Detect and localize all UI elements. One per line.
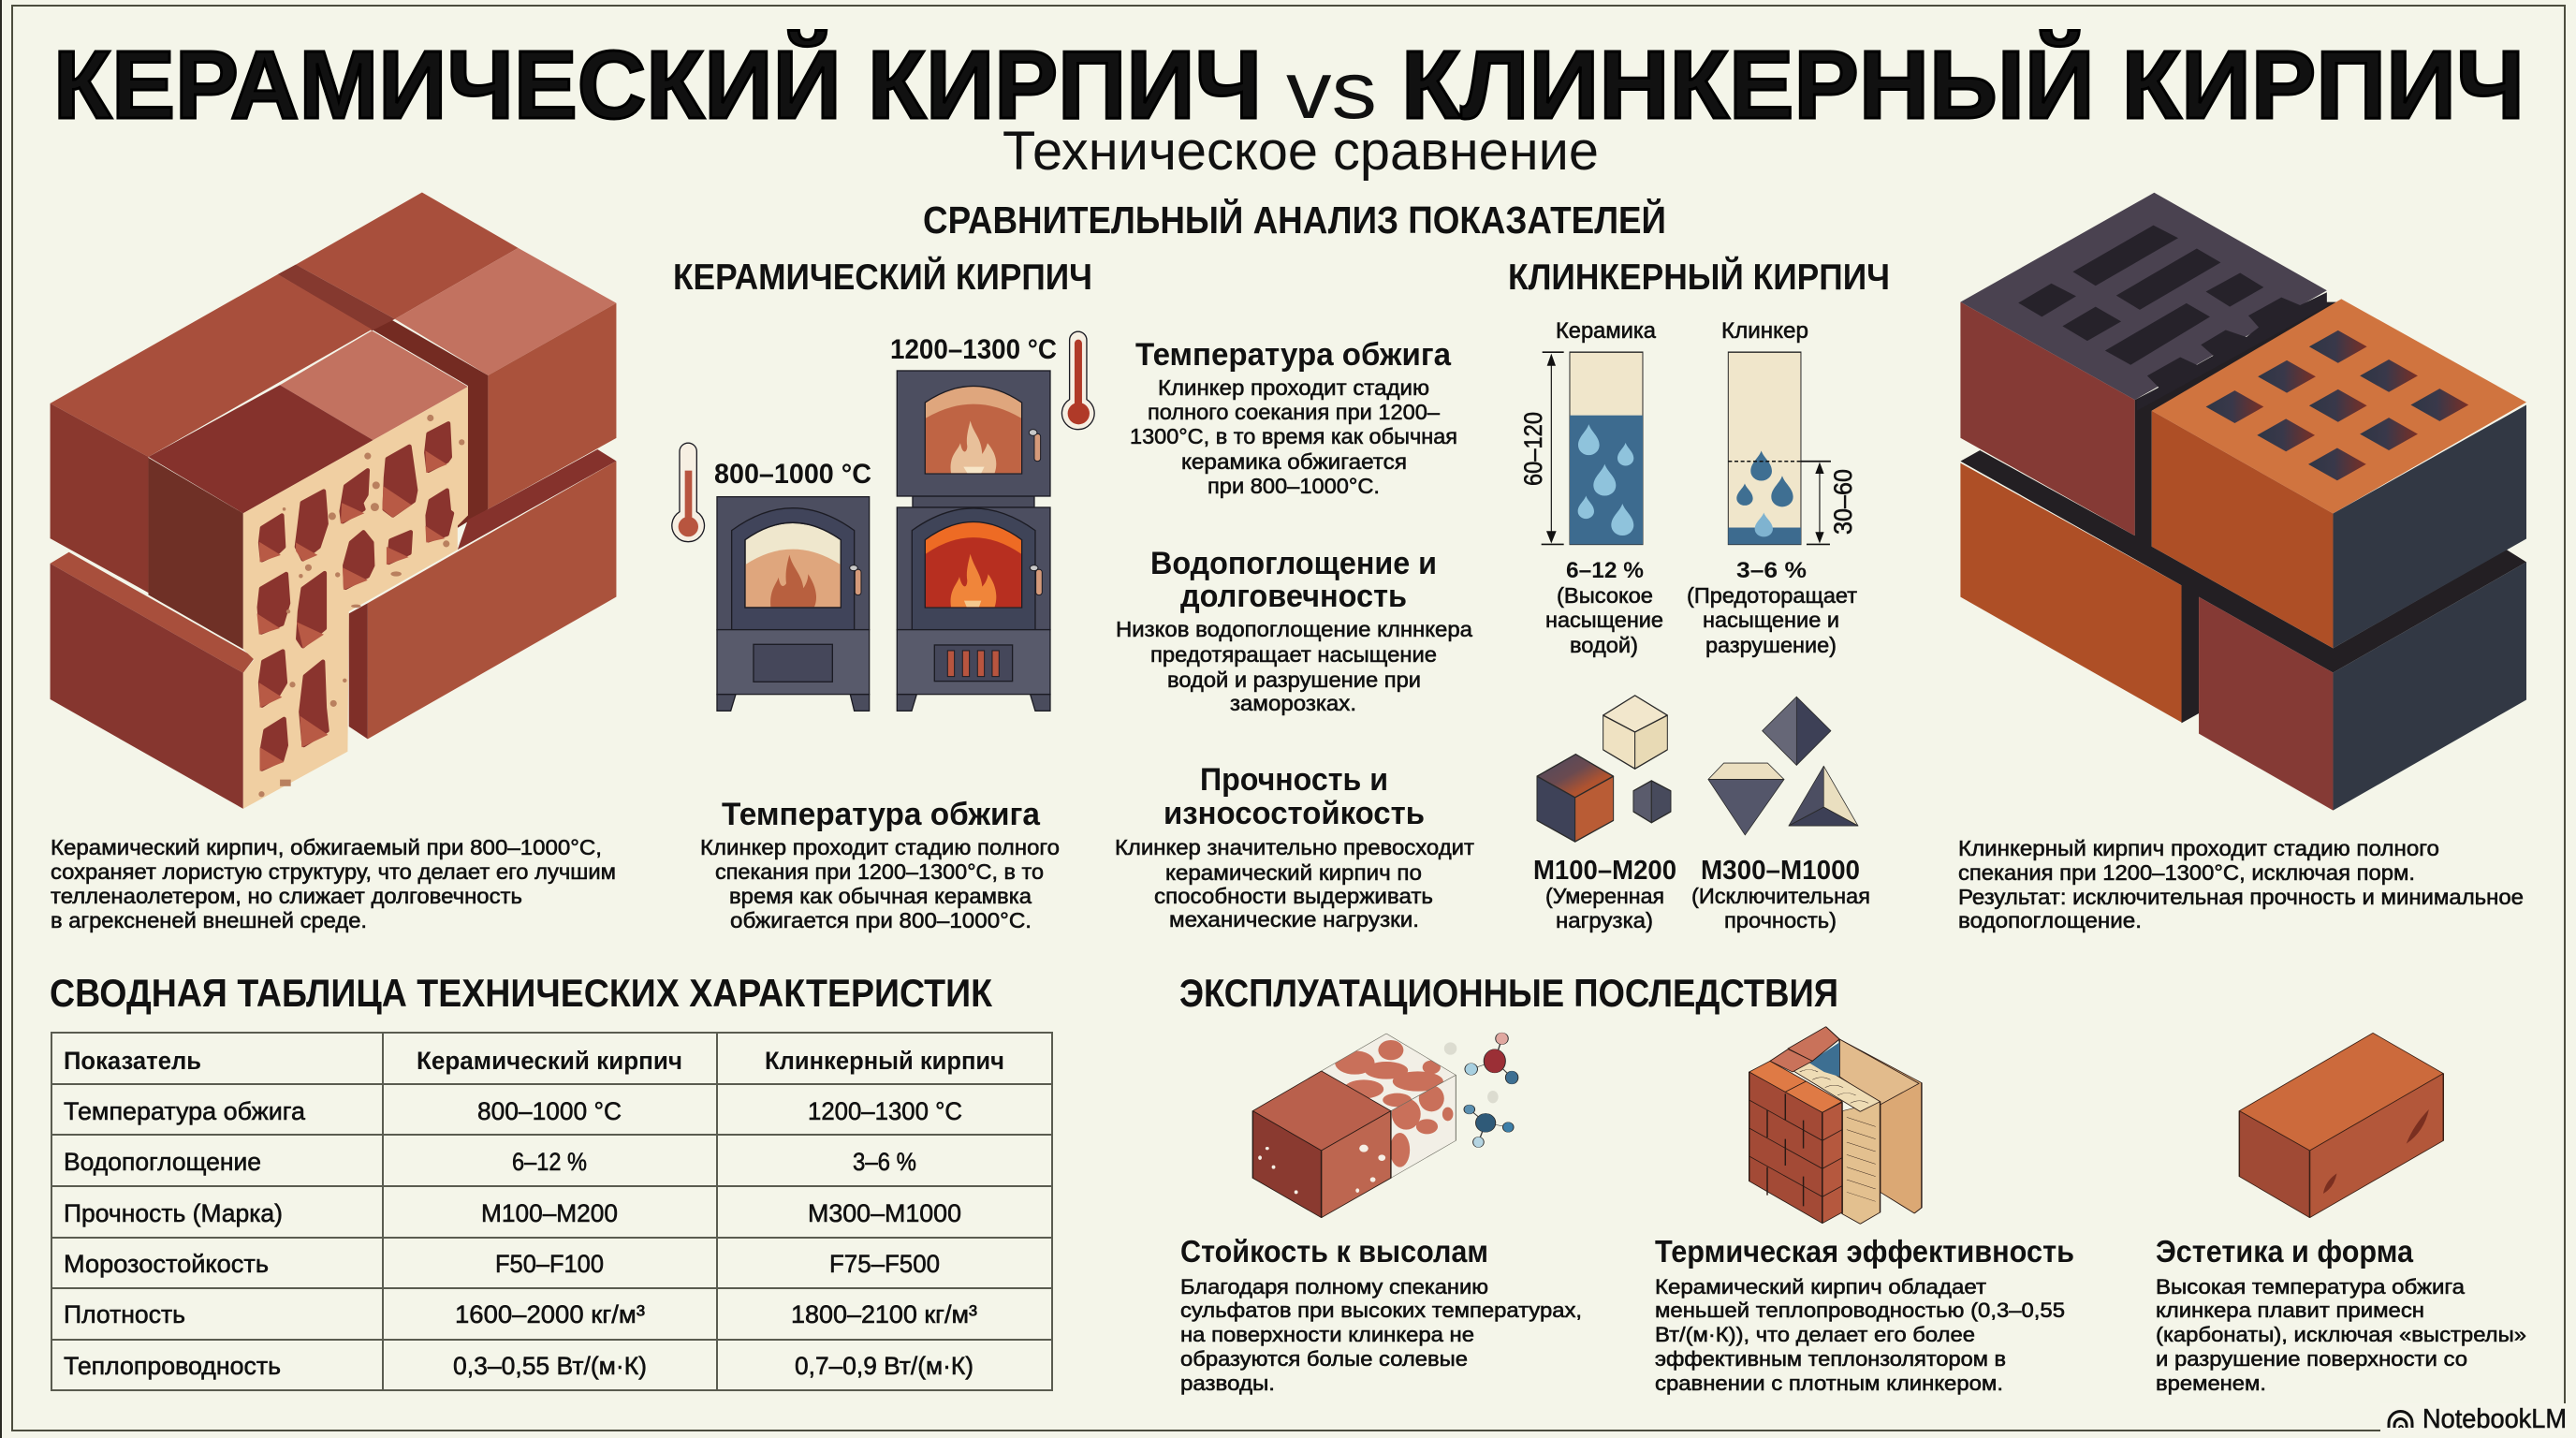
- text block: efflorescence resistance: на поверхности клинкера не: [1180, 1323, 1474, 1346]
- label: ceramic absorption value: водой): [1570, 633, 1638, 657]
- label: ceramic strength grade: М100–М200: [1533, 856, 1676, 886]
- label: ceramic absorption value: (Высокое: [1557, 583, 1653, 608]
- heading: summary table: СВОДНАЯ ТАБЛИЦА ТЕХНИЧЕСКИХ ХАРАКТЕРИСТИК: [50, 971, 992, 1015]
- label: ceramic absorption value: насыщение: [1545, 608, 1663, 632]
- table: technical characteristics: Показатель: [64, 1047, 201, 1075]
- text block: aesthetics and form: клинкера плавит примесн: [2156, 1299, 2424, 1322]
- text block: firing temperature under furnaces: обжигается при 800–1000°С.: [730, 908, 1032, 932]
- icon: ceramic strength cubes: [1537, 696, 1671, 842]
- text block: thermal efficiency: [1655, 1234, 2074, 1395]
- table: technical characteristics: Водопоглощение: [64, 1148, 261, 1176]
- text block: strength and wear resistance: Прочность и: [1200, 762, 1388, 798]
- table: technical characteristics: Керамический кирпич: [417, 1047, 682, 1075]
- title: [53, 30, 2525, 139]
- label: ceramic strength grade: [1533, 856, 1676, 932]
- text block: strength and wear resistance: способности выдерживать: [1154, 884, 1433, 908]
- text block: strength and wear resistance: износостойкость: [1164, 796, 1425, 831]
- table: technical characteristics: Теплопроводность: [64, 1352, 281, 1380]
- label: ceramic strength grade: нагрузка): [1556, 908, 1653, 932]
- label: clinker absorption value: 3–6 %: [1736, 558, 1807, 583]
- text block: firing temperature under furnaces: Клинкер проходит стадию полного: [700, 835, 1060, 859]
- text block: clinker brick description: [1958, 836, 2524, 932]
- heading: operating consequences: ЭКСПЛУАТАЦИОННЫЕ ПОСЛЕДСТВИЯ: [1179, 971, 1838, 1015]
- text block: aesthetics and form: (карбонаты), исключая «выстрелы»: [2156, 1323, 2526, 1346]
- label: clinker firing temperature: 1200–1300 °C: [890, 334, 1057, 365]
- text block: firing temperature under furnaces: [700, 797, 1060, 932]
- table: technical characteristics: F75–F500: [829, 1250, 940, 1278]
- icon: clinker furnace: [897, 371, 1050, 711]
- text block: thermal efficiency: Вт/(м·К)), что делает его более: [1655, 1323, 1975, 1346]
- text block: water absorption and durability: заморозках.: [1230, 691, 1356, 715]
- text block: firing temperature: Температура обжига: [1135, 337, 1452, 373]
- icon: efflorescence brick with molecules: [1252, 1033, 1518, 1218]
- table: technical characteristics: 1800–2100 кг/м³: [791, 1300, 977, 1328]
- table: technical characteristics: Плотность: [64, 1300, 185, 1328]
- icon: wall section with insulation: [1749, 1027, 1922, 1224]
- chart: water absorption columns: [1519, 318, 1857, 544]
- table: technical characteristics: 0,3–0,55 Вт/(м·К): [453, 1352, 647, 1380]
- heading: clinker brick: КЛИНКЕРНЫЙ КИРПИЧ: [1508, 256, 1890, 298]
- label: clinker strength grade: (Исключительная: [1691, 884, 1870, 908]
- icon: ceramic furnace: [717, 497, 870, 711]
- text block: strength and wear resistance: керамический кирпич по: [1165, 860, 1422, 885]
- text block: water absorption and durability: Водопоглощение и: [1150, 546, 1437, 581]
- text block: efflorescence resistance: разводы.: [1180, 1372, 1275, 1395]
- text block: efflorescence resistance: Благодаря полному спеканию: [1180, 1275, 1488, 1299]
- table: technical characteristics: 800–1000 °С: [477, 1097, 622, 1125]
- text block: aesthetics and form: [2156, 1234, 2526, 1395]
- illustration: clinker brick stack: [1960, 193, 2526, 811]
- label: ceramic absorption value: [1545, 558, 1663, 657]
- illustration: ceramic brick stack: [51, 192, 616, 809]
- label: clinker strength grade: [1691, 856, 1870, 932]
- label: clinker absorption value: насыщение и: [1703, 608, 1839, 632]
- table: technical characteristics: [51, 1033, 1052, 1390]
- label: ceramic strength grade: (Умеренная: [1545, 884, 1664, 908]
- chart: water absorption columns: Клинкер: [1721, 318, 1808, 344]
- text block: thermal efficiency: меньшей теплопроводностью (0,3–0,55: [1655, 1299, 2065, 1322]
- heading: comparative analysis: СРАВНИТЕЛЬНЫЙ АНАЛИЗ ПОКАЗАТЕЛЕЙ: [923, 198, 1666, 242]
- text block: ceramic brick description: Керамический кирпич, обжигаемый при 800–1000°С,: [51, 835, 602, 859]
- icon: right thermometer: [1061, 331, 1094, 430]
- label: ceramic absorption value: 6–12 %: [1566, 558, 1644, 583]
- text block: thermal efficiency: Керамический кирпич обладает: [1655, 1275, 1986, 1299]
- label: ceramic firing temperature: 800–1000 °C: [714, 459, 871, 490]
- table: technical characteristics: 6–12 %: [512, 1148, 587, 1176]
- text block: ceramic brick description: [51, 835, 616, 932]
- chart: water absorption columns: 60–120: [1519, 412, 1547, 486]
- table: technical characteristics: 3–6 %: [853, 1148, 916, 1176]
- chart: water absorption columns: Керамика: [1556, 318, 1657, 344]
- text block: firing temperature under furnaces: Температура обжига: [722, 797, 1041, 832]
- table: technical characteristics: 1200–1300 °С: [808, 1097, 962, 1125]
- text block: ceramic brick description: в агрексненей внешней среде.: [51, 908, 367, 932]
- text block: firing temperature: [1130, 337, 1457, 498]
- text block: water absorption and durability: долговечность: [1180, 579, 1407, 614]
- text block: firing temperature: керамика обжигается: [1181, 449, 1407, 474]
- icon: brick without defects: [2239, 1033, 2443, 1218]
- table: technical characteristics: М100–М200: [481, 1199, 618, 1227]
- text block: efflorescence resistance: образуются болые солевые: [1180, 1347, 1468, 1371]
- text block: thermal efficiency: Термическая эффективность: [1655, 1234, 2074, 1269]
- text block: efflorescence resistance: сульфатов при высоких температурах,: [1180, 1299, 1582, 1322]
- heading: ceramic brick: КЕРАМИЧЕСКИЙ КИРПИЧ: [673, 256, 1092, 298]
- text block: strength and wear resistance: механические нагрузки.: [1169, 907, 1419, 932]
- text block: strength and wear resistance: [1115, 762, 1474, 932]
- text block: clinker brick description: Клинкерный кирпич проходит стадию полного: [1958, 836, 2439, 860]
- label: clinker absorption value: [1687, 558, 1857, 657]
- text block: firing temperature: 1300°С, в то время как обычная: [1130, 424, 1457, 448]
- text block: strength and wear resistance: Клинкер значительно превосходит: [1115, 835, 1474, 859]
- title: КЕРАМИЧЕСКИЙ КИРПИЧ: [53, 30, 1262, 139]
- table: technical characteristics: Клинкерный кирпич: [765, 1047, 1004, 1075]
- text block: firing temperature: полного соекания при 1200–: [1148, 400, 1440, 424]
- text block: aesthetics and form: временем.: [2156, 1372, 2266, 1395]
- text block: firing temperature: при 800–1000°С.: [1208, 474, 1380, 498]
- text block: firing temperature: Клинкер проходит стадию: [1158, 375, 1429, 400]
- text block: efflorescence resistance: Стойкость к высолам: [1180, 1234, 1488, 1269]
- chart: water absorption columns: 30–60: [1829, 469, 1857, 535]
- text block: clinker brick description: спекания при 1200–1300°С, исключая порм.: [1958, 860, 2415, 885]
- subtitle: Техническое сравнение: [1003, 121, 1599, 182]
- text block: ceramic brick description: телленаолетером, но слижает долговечность: [51, 884, 522, 908]
- text block: water absorption and durability: [1116, 546, 1472, 715]
- text block: ceramic brick description: сохраняет лористую структуру, что делает его лучшим: [51, 859, 616, 884]
- title: КЛИНКЕРНЫЙ КИРПИЧ: [1401, 30, 2525, 139]
- icon: clinker strength crystals: [1708, 697, 1858, 835]
- illustration: furnaces and thermometers: [672, 331, 1094, 711]
- text block: water absorption and durability: водой и разрушение при: [1167, 668, 1421, 692]
- table: technical characteristics: Прочность (Марка): [64, 1199, 283, 1227]
- text block: aesthetics and form: и разрушение поверхности со: [2156, 1347, 2467, 1371]
- text block: firing temperature under furnaces: спекания при 1200–1300°С, в то: [715, 859, 1044, 884]
- label: clinker strength grade: прочность): [1724, 908, 1837, 932]
- table: technical characteristics: 1600–2000 кг/м³: [455, 1300, 645, 1328]
- text block: aesthetics and form: Высокая температура обжига: [2156, 1275, 2466, 1299]
- table: technical characteristics: 0,7–0,9 Вт/(м·К): [795, 1352, 973, 1380]
- label: clinker strength grade: М300–М1000: [1701, 856, 1860, 886]
- table: technical characteristics: F50–F100: [495, 1250, 604, 1278]
- text block: thermal efficiency: сравнении с плотным клинкером.: [1655, 1372, 2003, 1395]
- watermark: NotebookLM: NotebookLM: [2422, 1404, 2567, 1434]
- text block: efflorescence resistance: [1180, 1234, 1582, 1395]
- label: clinker absorption value: (Предоторащает: [1687, 583, 1857, 608]
- text block: aesthetics and form: Эстетика и форма: [2156, 1234, 2414, 1269]
- table: technical characteristics: Температура обжига: [64, 1097, 306, 1125]
- text block: firing temperature under furnaces: время как обычная керамвка: [729, 884, 1032, 908]
- title: vs: [1286, 46, 1377, 136]
- text block: clinker brick description: водопоглощение.: [1958, 908, 2142, 932]
- text block: clinker brick description: Результат: исключительная прочность и минимальное: [1958, 885, 2524, 909]
- table: technical characteristics: М300–М1000: [808, 1199, 961, 1227]
- text block: water absorption and durability: предотяращает насыщение: [1150, 642, 1437, 667]
- label: clinker absorption value: разрушение): [1705, 633, 1837, 657]
- text block: thermal efficiency: эффективным теплонзолятором в: [1655, 1347, 2006, 1371]
- table: technical characteristics: Морозостойкость: [64, 1250, 269, 1278]
- icon: left thermometer: [672, 443, 704, 542]
- text block: water absorption and durability: Низков водопоглощение клннкера: [1116, 617, 1472, 641]
